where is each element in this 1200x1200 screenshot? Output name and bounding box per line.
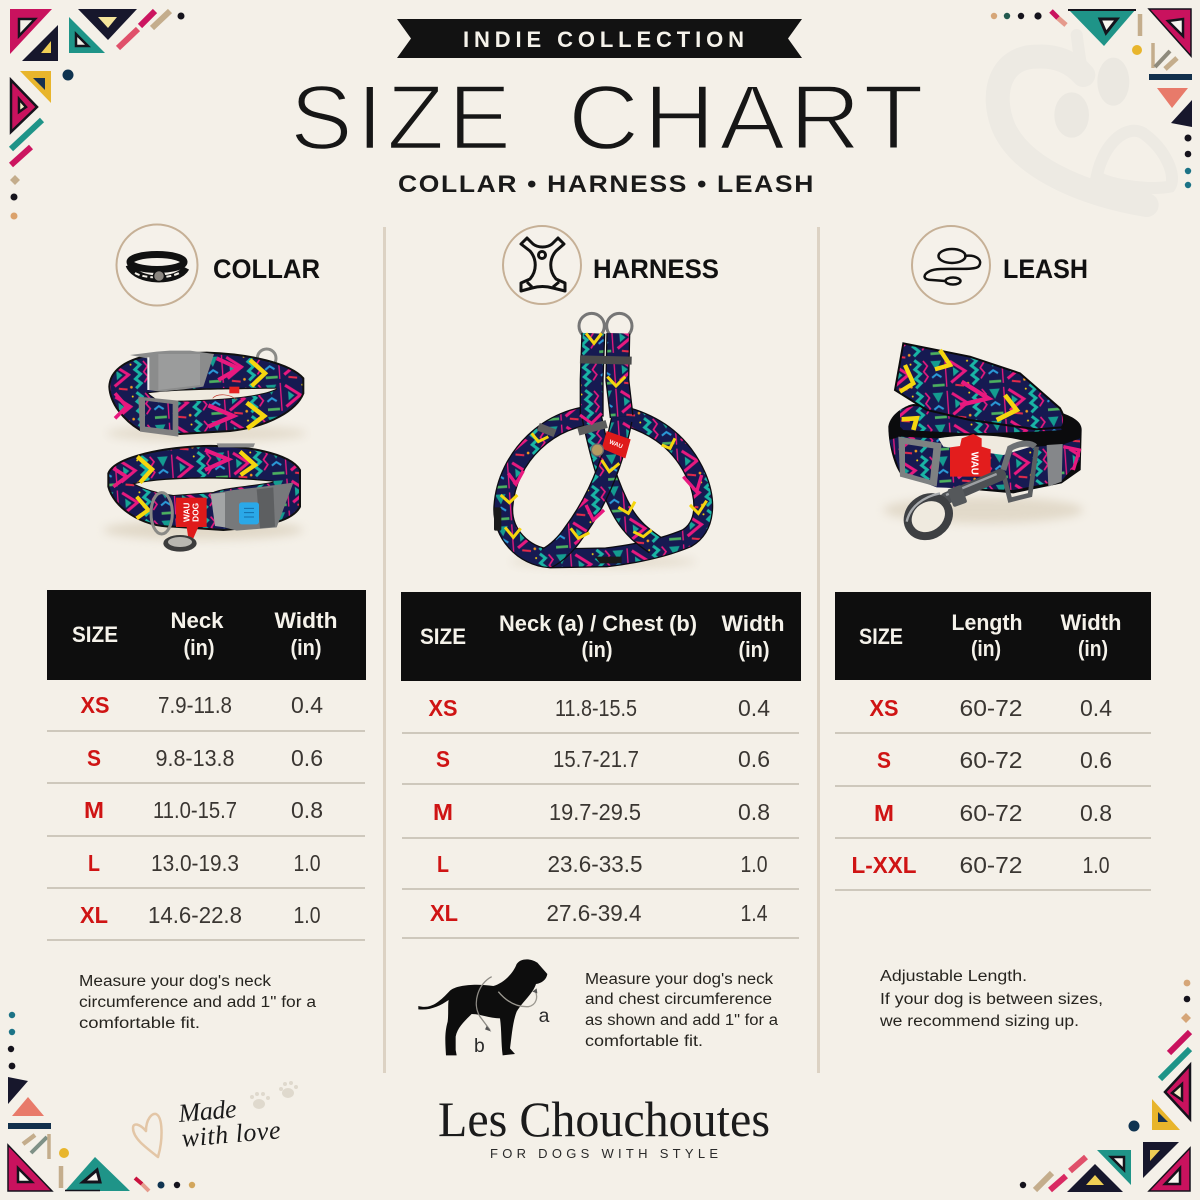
leash size table: Length	[952, 610, 1022, 635]
collar size table: Neck	[170, 608, 224, 633]
harness size table: 11.8-15.5	[555, 695, 637, 721]
harness size table: L	[437, 851, 449, 877]
collar size table: L	[88, 850, 100, 876]
leash size table: M	[874, 800, 894, 826]
harness size table: XL	[430, 900, 458, 926]
harness note: comfortable fit.	[585, 1033, 703, 1050]
collar tag text 2: DOG	[191, 503, 201, 522]
brand logo: Les Chouchoutes	[438, 1091, 770, 1147]
harness size table: 19.7-29.5	[549, 799, 641, 825]
collar note: circumference and add 1" for a	[79, 994, 316, 1011]
harness size table: (in)	[582, 637, 612, 662]
leash size table: 0.4	[1080, 695, 1112, 721]
Made with love script: with love	[180, 1115, 282, 1153]
collar size table: 0.8	[291, 797, 323, 823]
Made with love script	[176, 1090, 282, 1153]
icon: paw prints	[250, 1081, 298, 1109]
leash size table: 0.6	[1080, 747, 1112, 773]
leash size table: 60-72	[960, 852, 1022, 878]
collar size table: 13.0-19.3	[151, 850, 239, 876]
harness size table: 1.4	[740, 900, 768, 926]
panel: harness	[401, 226, 801, 1057]
leash heading: LEASH	[1003, 254, 1088, 284]
leash size table: 0.8	[1080, 800, 1112, 826]
leash size table: SIZE	[859, 624, 903, 649]
collar heading icon	[116, 224, 198, 306]
harness size table	[401, 592, 801, 938]
collar size table: 0.4	[291, 692, 323, 718]
collar size table	[47, 590, 366, 940]
leash size table: 60-72	[960, 695, 1022, 721]
leash size table: 60-72	[960, 800, 1022, 826]
harness size table: SIZE	[420, 624, 466, 649]
leash size table: (in)	[1078, 636, 1108, 661]
collar size table: (in)	[290, 635, 322, 660]
collar size table: (in)	[184, 635, 214, 660]
leash size table	[835, 592, 1151, 890]
harness size table: M	[433, 799, 453, 825]
collar size table: XS	[80, 692, 110, 718]
collar size table: 7.9-11.8	[158, 692, 232, 718]
leash note: If your dog is between sizes,	[880, 991, 1103, 1008]
harness heading icon	[503, 226, 581, 304]
harness size table: 27.6-39.4	[546, 900, 642, 926]
label a: a	[539, 1006, 550, 1027]
column dividers	[384, 227, 818, 1073]
corner decoration: top left	[10, 9, 184, 220]
harness size table: 23.6-33.5	[548, 851, 642, 877]
Made with love script: Made	[176, 1094, 238, 1128]
harness size table: S	[436, 746, 450, 772]
collar product illustration	[103, 349, 307, 552]
label b: b	[474, 1036, 485, 1057]
leash note: we recommend sizing up.	[879, 1013, 1079, 1030]
collar heading: COLLAR	[213, 254, 320, 284]
leash size table: XS	[870, 695, 898, 721]
collar size table: 1.0	[294, 902, 320, 928]
leash size table: 1.0	[1082, 852, 1110, 878]
collar size table: S	[87, 745, 101, 771]
leash product illustration	[883, 343, 1083, 544]
harness size table: 0.8	[738, 799, 770, 825]
leash tag text: WAU	[969, 452, 980, 475]
harness size table: Neck (a) / Chest (b)	[499, 611, 697, 636]
icon: heart outline	[133, 1114, 162, 1157]
collar size table: Width	[274, 608, 338, 633]
corner decoration: bottom right	[1020, 980, 1191, 1192]
leash size table: 60-72	[960, 747, 1022, 773]
banner: Indie Collection: INDIE COLLECTION	[463, 27, 744, 52]
collar size table: 14.6-22.8	[148, 902, 242, 928]
collar size table: 0.6	[291, 745, 323, 771]
harness note: and chest circumference	[585, 991, 772, 1008]
leash size table: L-XXL	[852, 852, 916, 878]
corner decoration: bottom left	[8, 1012, 195, 1191]
harness size table: 1.0	[740, 851, 768, 877]
watermark: heart and paw logo	[998, 35, 1172, 205]
harness size table: 0.4	[738, 695, 770, 721]
title: CHART	[568, 67, 928, 169]
harness size table: (in)	[738, 637, 770, 662]
title: SIZE	[290, 67, 515, 169]
panel: leash	[835, 226, 1151, 1030]
harness note: Measure your dog's neck	[585, 971, 773, 988]
harness size table: XS	[428, 695, 458, 721]
collar note: Measure your dog's neck	[79, 973, 271, 990]
collar note: comfortable fit.	[79, 1015, 200, 1032]
leash size table: Width	[1060, 610, 1122, 635]
panel: collar	[47, 224, 366, 1032]
collar size table: 11.0-15.7	[153, 797, 237, 823]
collar tag text: WAU	[181, 503, 191, 522]
harness product illustration	[494, 313, 707, 568]
harness note: as shown and add 1" for a	[585, 1012, 778, 1029]
collar size table: M	[84, 797, 104, 823]
harness heading: HARNESS	[593, 254, 719, 284]
harness size table: 0.6	[738, 746, 770, 772]
subtitle: COLLAR • HARNESS • LEASH	[398, 171, 815, 198]
collar size table: XL	[80, 902, 108, 928]
collar size table: 9.8-13.8	[156, 745, 234, 771]
leash note: Adjustable Length.	[880, 968, 1027, 985]
harness size table: 15.7-21.7	[553, 746, 639, 772]
leash heading icon	[912, 226, 990, 304]
icon: dog measuring silhouette	[418, 959, 550, 1057]
harness size table: Width	[722, 611, 784, 636]
brand logo: FOR DOGS WITH STYLE	[490, 1146, 718, 1161]
corner decoration: top right	[991, 9, 1192, 188]
harness tag text: WAU	[608, 440, 623, 450]
banner: Indie Collection	[397, 19, 802, 58]
collar size table: 1.0	[294, 850, 320, 876]
collar size table: SIZE	[72, 622, 118, 647]
leash size table: S	[877, 747, 891, 773]
leash size table: (in)	[971, 636, 1001, 661]
